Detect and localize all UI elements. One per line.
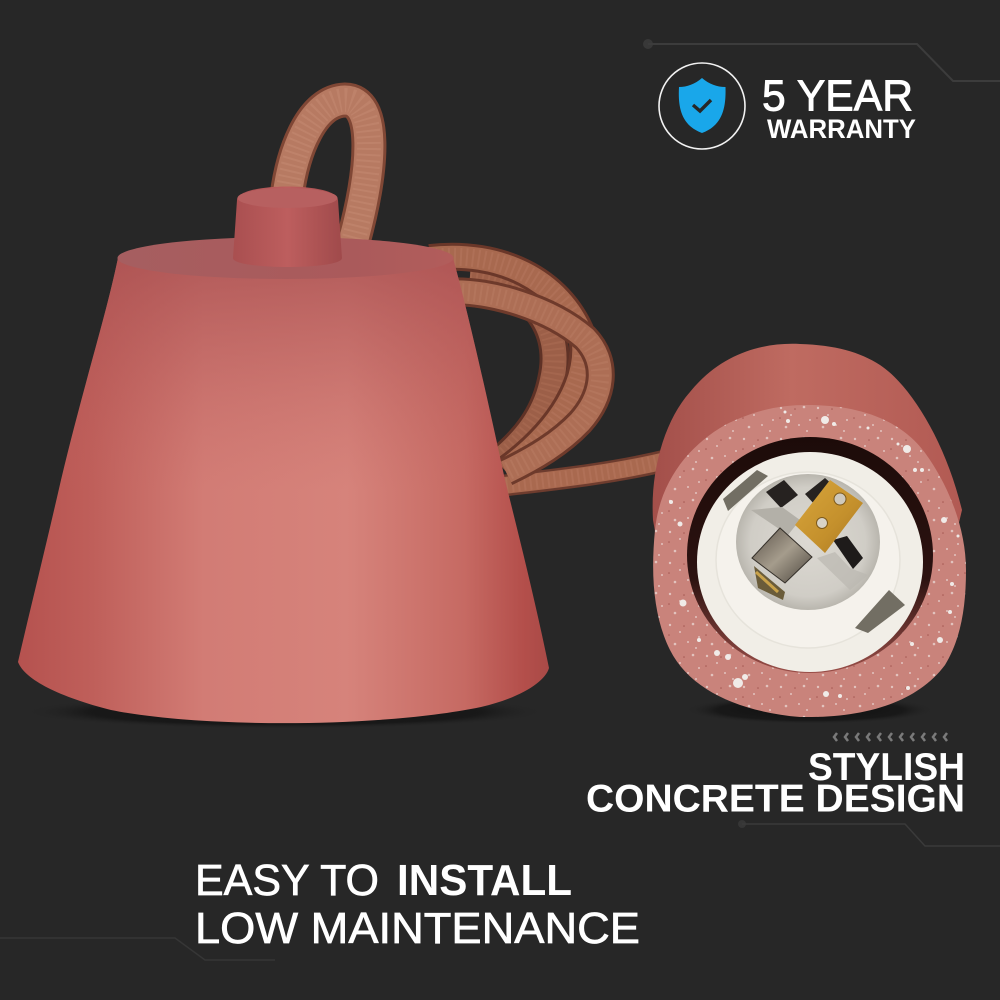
caption: easy to install, low maintenance (195, 856, 640, 953)
decorative chevron row (834, 733, 947, 741)
socket body (653, 344, 962, 560)
product: fabric cables behind the shade (430, 257, 668, 486)
shade cone (18, 258, 549, 723)
shade shading (18, 258, 549, 723)
concrete speckle texture (653, 405, 966, 717)
concrete speckles (669, 410, 960, 698)
socket dark opening (687, 437, 933, 673)
caption: easy to install, low maintenance: EASY TO (195, 856, 379, 905)
product: concrete socket (653, 344, 966, 717)
badge circle (659, 63, 745, 149)
circuit line: lower right (738, 820, 1000, 846)
inner cable strands (470, 276, 555, 462)
circuit line: top right (643, 39, 1000, 81)
product: cable loop above the shade (287, 100, 369, 242)
lamp holder recess (736, 474, 880, 610)
caption: stylish concrete design: CONCRETE DESIGN (586, 778, 965, 820)
shade top cap (233, 186, 342, 267)
metal contact (752, 528, 812, 600)
front outer strand (450, 292, 600, 472)
warranty text: WARRANTY (767, 114, 916, 144)
caption: stylish concrete design (586, 746, 965, 820)
shade top face (118, 237, 454, 279)
warranty badge (659, 63, 916, 149)
warranty text: 5 YEAR (762, 72, 913, 120)
icon: shield with check (679, 78, 726, 133)
floor shadows (23, 695, 935, 729)
caption: easy to install, low maintenance: LOW MAINTENANCE (195, 904, 640, 953)
slot right (855, 590, 905, 633)
caption: stylish concrete design: STYLISH (808, 746, 965, 789)
brass contact (795, 480, 863, 553)
lamp holder white ring (697, 452, 923, 672)
socket front ring (653, 405, 966, 717)
slot left (723, 470, 768, 511)
warranty text (762, 72, 916, 144)
dark contacts (766, 480, 798, 508)
product: concrete pendant shade (18, 186, 549, 723)
shadow planes inside recess (751, 507, 800, 535)
circuit line: bottom left (0, 938, 275, 960)
caption: easy to install, low maintenance: INSTALL (397, 856, 572, 905)
lower cable to socket (500, 460, 668, 486)
